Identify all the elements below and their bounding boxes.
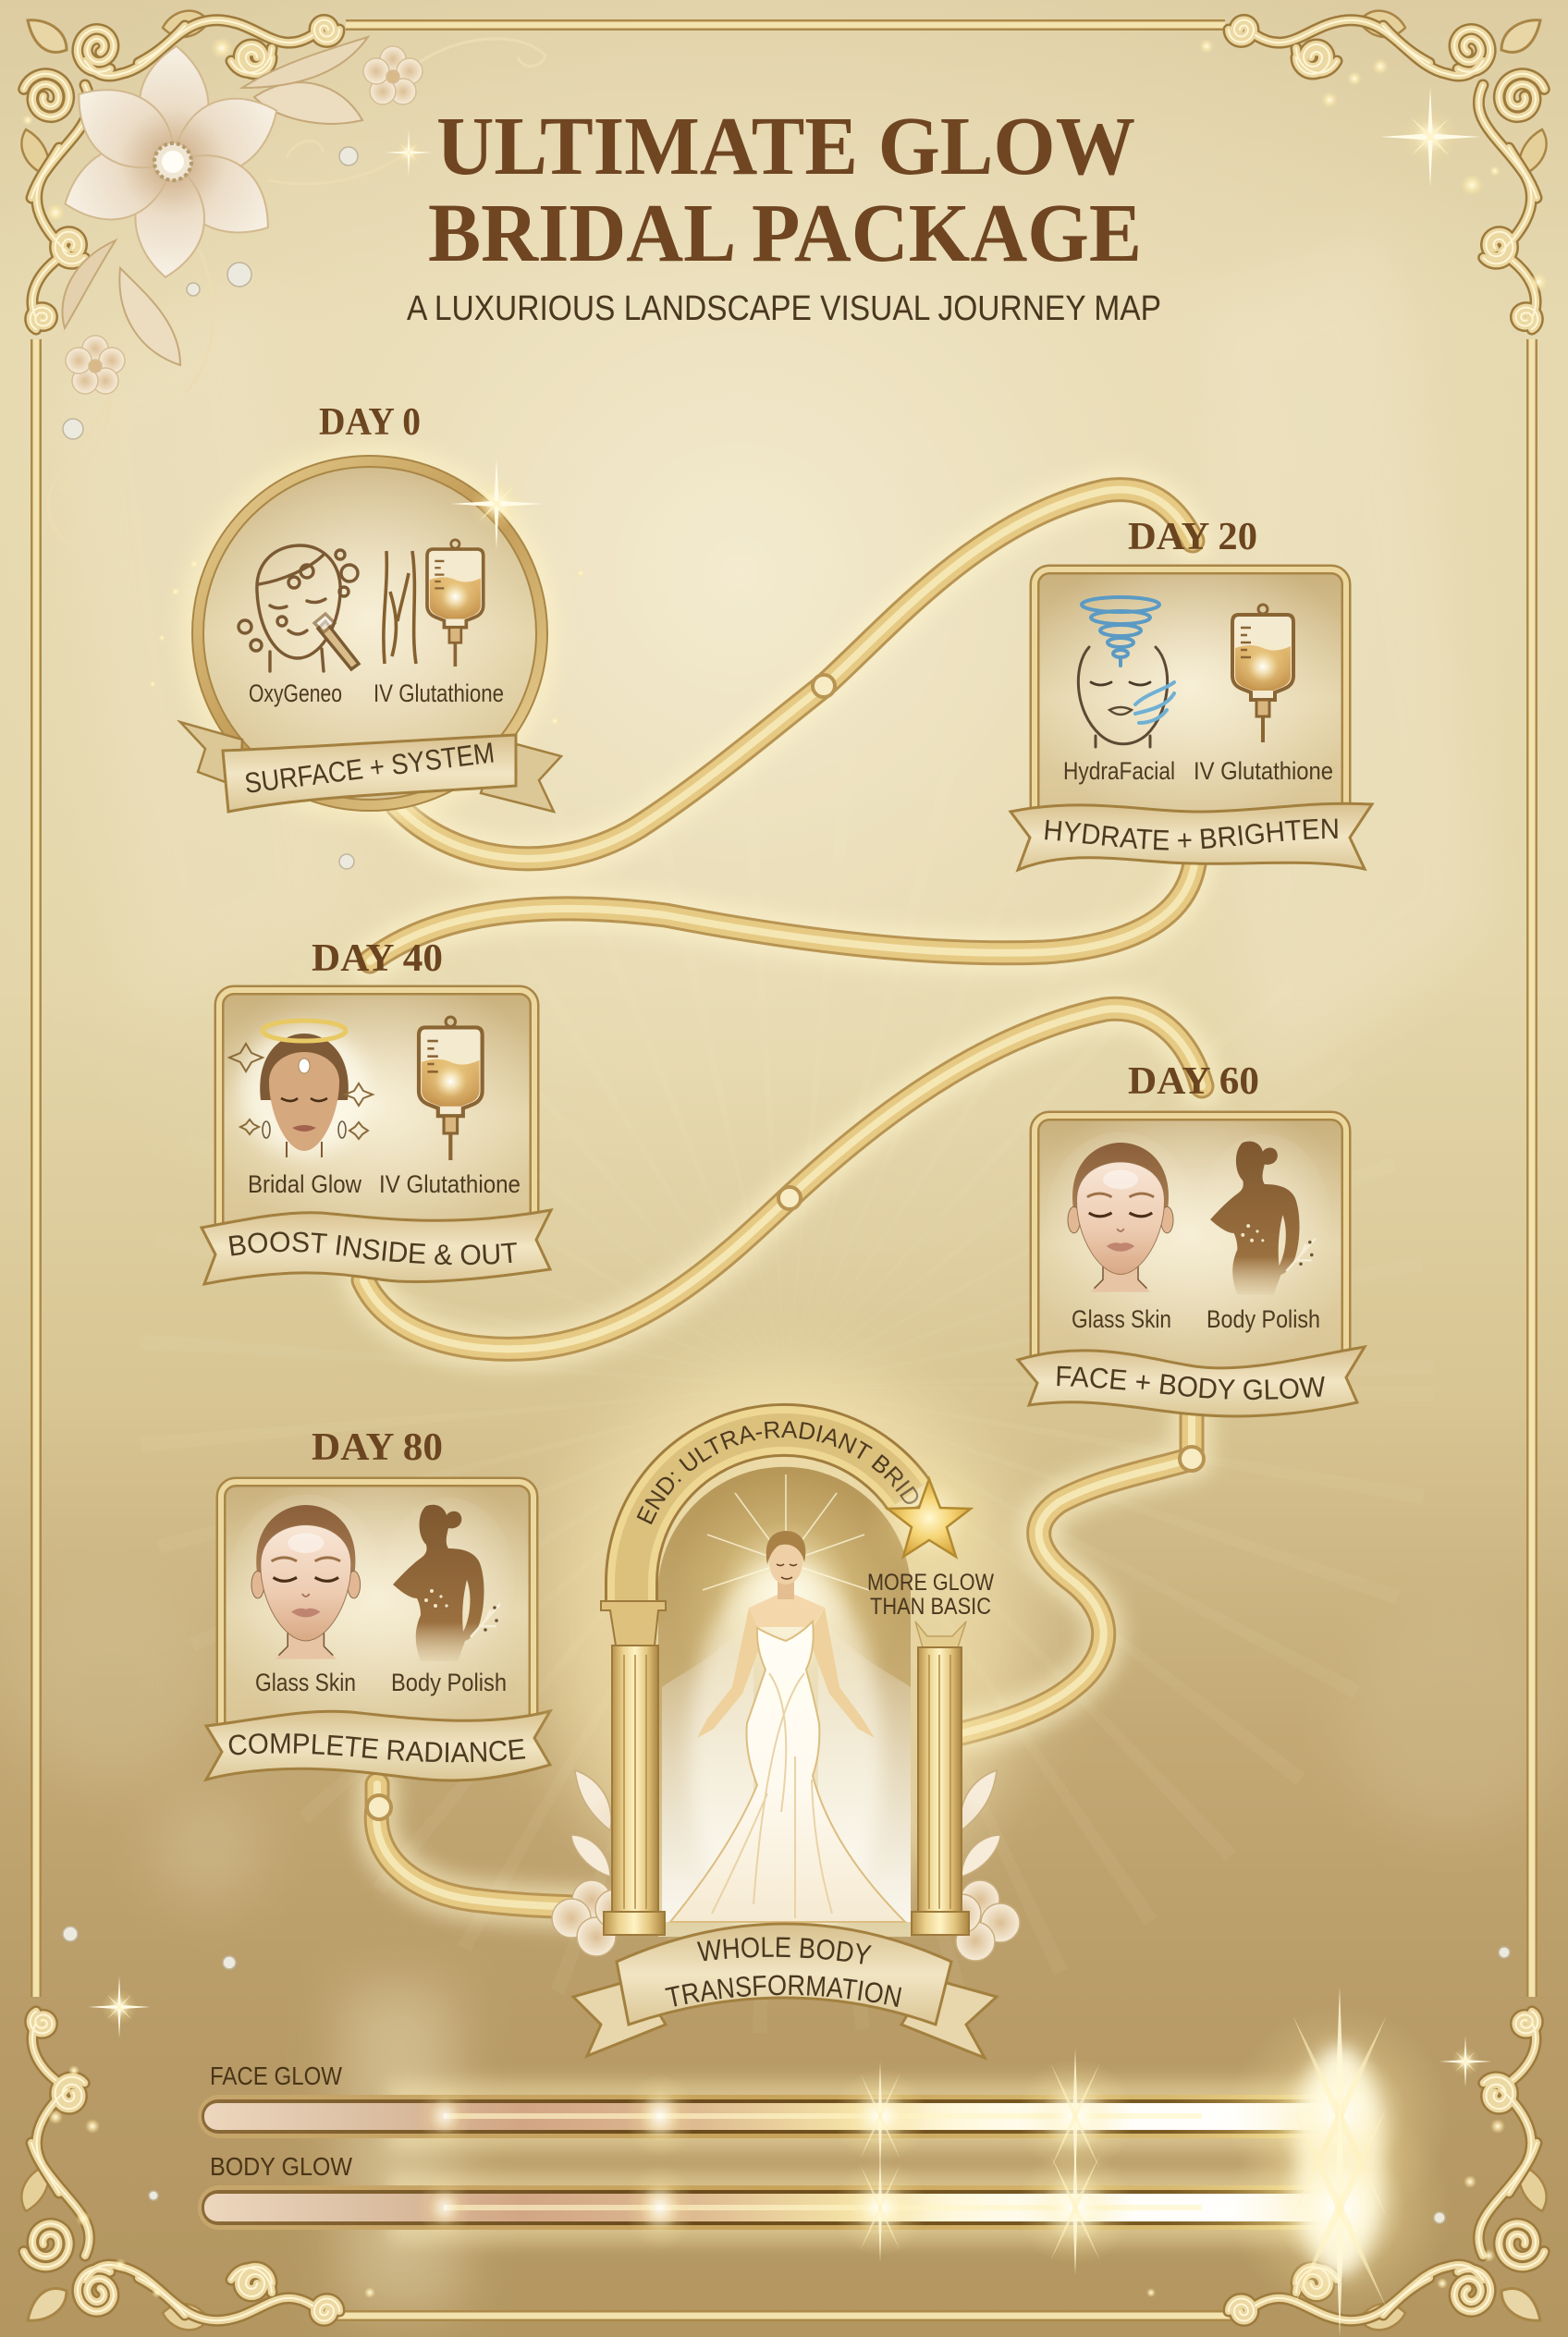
banner: whole body transformation [570, 1923, 999, 2061]
arch glow [564, 1377, 1008, 1914]
treatment labels: IV Glutathione [1194, 757, 1333, 785]
day 0 label: DAY 0 [319, 401, 421, 444]
subtitle: A LUXURIOUS LANDSCAPE VISUAL JOURNEY MAP [407, 289, 1161, 328]
day 40 label: DAY 40 [312, 937, 443, 980]
star badge [863, 1452, 996, 1585]
ribbon: face + body glow: FACE + BODY GLOW [1057, 1366, 1325, 1400]
day 20 card [1035, 569, 1346, 828]
corner top right [1229, 11, 1550, 334]
right column [912, 1621, 969, 1935]
leaves and stems [48, 37, 545, 550]
treatment labels: Bridal Glow [248, 1170, 361, 1198]
corner bottom left [18, 2007, 339, 2330]
day 0 medallion [180, 444, 559, 823]
corner bottom right [1229, 2007, 1550, 2330]
treatment labels: IV Glutathione [379, 1170, 521, 1198]
ribbon: surface + system [177, 719, 564, 814]
callout: more glow than basic [867, 1570, 994, 1620]
treatment labels [249, 679, 504, 707]
path nodes [367, 675, 1204, 1819]
treatment labels: IV Glutathione [374, 679, 504, 707]
small sparkle near title [385, 128, 433, 177]
icon: glass skin face [229, 1494, 382, 1661]
arch text: END: ULTRA-RADIANT BRIDE [636, 1421, 919, 1525]
ribbon: boost inside and out [200, 1208, 554, 1286]
icon: oxygeneo face with brush [239, 545, 359, 671]
panel: day 20 [1008, 516, 1375, 873]
panel: day 40 [200, 937, 554, 1286]
icon: iv bag [1232, 605, 1293, 742]
path body [363, 490, 1202, 1908]
icon: body polish silhouette [382, 1498, 515, 1664]
panel: day 80 [203, 1426, 553, 1782]
main flower [54, 43, 291, 281]
icon: iv bag [419, 1017, 483, 1160]
banner: whole body transformation: WHOLE BODY [697, 1938, 872, 1964]
icon: iv bag [427, 540, 484, 667]
bar halo [388, 2082, 1341, 2243]
ribbon: boost inside and out: BOOST INSIDE & OUT [229, 1231, 517, 1265]
day 80 label: DAY 80 [312, 1426, 443, 1469]
arch band [631, 1430, 909, 1609]
title line two: BRIDAL PACKAGE [428, 188, 1142, 279]
treatment labels: Glass Skin [255, 1669, 356, 1696]
callout: more glow than basic: THAN BASIC [870, 1594, 991, 1620]
icon: veins [384, 551, 416, 664]
left column [601, 1601, 666, 1935]
face glow bar [198, 2095, 1340, 2138]
floral decoration top left [48, 37, 545, 550]
body glow bar [198, 2185, 1340, 2230]
ribbon: hydrate + brighten [1008, 802, 1375, 873]
winding golden journey path [363, 490, 1204, 1908]
small flower top [363, 46, 423, 104]
icon: body polish silhouette [1199, 1134, 1329, 1298]
ribbon: complete radiance: COMPLETE RADIANCE [229, 1733, 525, 1762]
path glow [363, 490, 1202, 1908]
day 40 card [219, 990, 534, 1244]
day 60 card [1035, 1116, 1346, 1375]
chart: glow progress bars [198, 1987, 1451, 2337]
banner: whole body transformation: TRANSFORMATION [665, 1975, 901, 2007]
treatment labels [248, 1170, 521, 1198]
callout: more glow than basic: MORE GLOW [867, 1570, 994, 1596]
treatment labels [1072, 1305, 1320, 1333]
panel: day 0 [177, 401, 564, 829]
ribbon: complete radiance [203, 1708, 553, 1782]
icon: glass skin face [1047, 1132, 1194, 1293]
face glow label: FACE GLOW [210, 2062, 342, 2090]
arch interior [658, 1467, 911, 1937]
glint [450, 458, 543, 550]
body glow label: BODY GLOW [210, 2152, 353, 2181]
day 60 label: DAY 60 [1128, 1060, 1259, 1103]
treatment labels [255, 1669, 507, 1696]
day 20 label: DAY 20 [1128, 516, 1257, 558]
day 80 card [221, 1482, 533, 1741]
treatment labels: Body Polish [1207, 1305, 1320, 1333]
panel: day 60 [1015, 1060, 1367, 1418]
ribbon: hydrate + brighten: HYDRATE + BRIGHTEN [1045, 819, 1338, 850]
treatment labels: HydraFacial [1063, 757, 1175, 785]
small flower left [66, 336, 125, 394]
panel: end arch with bride [545, 1384, 1024, 2061]
side flowers [552, 1770, 1020, 1961]
treatment labels [1063, 757, 1333, 785]
treatment labels: Glass Skin [1072, 1305, 1171, 1333]
title block [407, 101, 1161, 328]
glow bursts [417, 1987, 1451, 2337]
ribbon: face + body glow [1015, 1345, 1367, 1418]
title line one: ULTIMATE GLOW [436, 101, 1135, 192]
treatment labels: OxyGeneo [249, 679, 342, 707]
bride figure [670, 1531, 905, 1922]
treatment labels: Body Polish [391, 1669, 507, 1696]
corner top left [18, 11, 339, 334]
icon: bridal glow face with halo [229, 1021, 373, 1157]
bride radiance [670, 1470, 901, 1951]
icon: hydrafacial face with vortex [1078, 597, 1174, 747]
bride veil [662, 1613, 911, 1922]
ribbon: surface + system: SURFACE + SYSTEM [246, 742, 494, 793]
